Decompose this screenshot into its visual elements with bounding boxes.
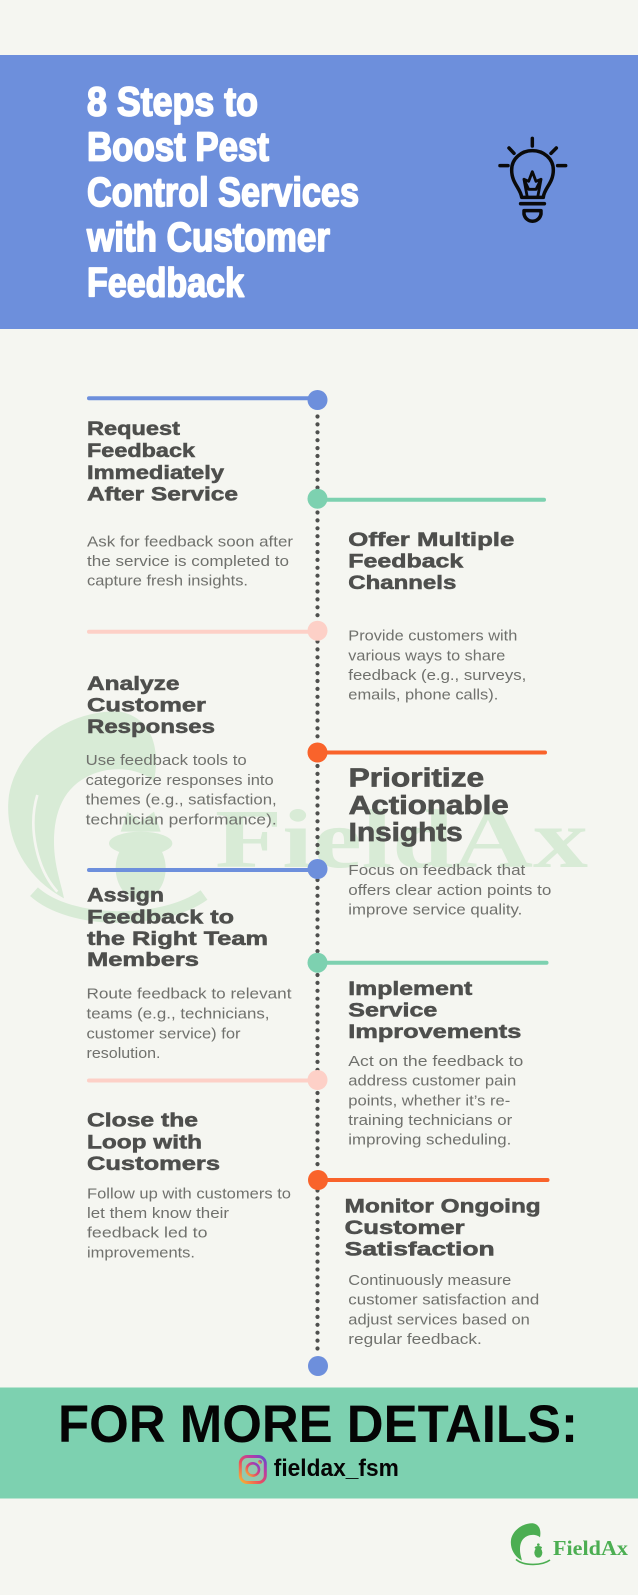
node: blue end xyxy=(308,1356,328,1376)
connector bar: green 2 xyxy=(322,961,546,965)
description: regular feedback. xyxy=(348,1331,482,1348)
heading: After Service xyxy=(87,483,238,505)
node: blue 1 xyxy=(308,390,328,410)
description: adjust services based on xyxy=(348,1311,530,1328)
description xyxy=(348,1053,523,1149)
heading xyxy=(348,978,521,1043)
connector bar: orange 2 xyxy=(322,1178,548,1182)
watermark: FieldAx logo: FieldAx xyxy=(215,793,588,886)
description: let them know their xyxy=(87,1205,229,1222)
heading: Feedback xyxy=(348,551,463,573)
description: Use feedback tools to xyxy=(86,752,247,769)
heading: Feedback xyxy=(87,440,195,462)
description: emails, phone calls). xyxy=(348,686,498,703)
description: Route feedback to relevant xyxy=(86,986,292,1003)
node: pink 1 xyxy=(308,621,328,641)
heading xyxy=(349,765,509,847)
description: feedback led to xyxy=(87,1225,208,1242)
header banner xyxy=(0,55,638,329)
description: Ask for feedback soon after xyxy=(87,534,293,551)
connector bar: green 1 xyxy=(322,498,544,502)
description: improving scheduling. xyxy=(348,1132,511,1149)
connector bar: pink 1 xyxy=(89,630,312,634)
heading: Immediately xyxy=(87,462,224,484)
heading: Members xyxy=(87,949,199,971)
node: green 2 xyxy=(308,953,328,973)
heading: Monitor Ongoing xyxy=(345,1195,541,1217)
heading: Assign xyxy=(87,885,164,907)
timeline xyxy=(89,390,548,1376)
heading: Offer Multiple xyxy=(348,529,514,551)
description xyxy=(348,1272,539,1348)
connector bar: pink 2 xyxy=(89,1078,312,1082)
heading: Implement xyxy=(348,978,473,1000)
description: Act on the feedback to xyxy=(348,1053,523,1070)
node: orange 2 xyxy=(308,1170,328,1190)
connector bar: blue 1 xyxy=(89,396,312,400)
icon: instagram xyxy=(240,1456,265,1482)
heading: Feedback to xyxy=(87,906,234,928)
description: resolution. xyxy=(86,1045,160,1062)
description xyxy=(348,862,551,918)
heading: Service xyxy=(348,1000,437,1022)
instagram handle: fieldax_fsm xyxy=(274,1455,399,1482)
step: implement improvements xyxy=(348,978,523,1149)
title: 8 Steps to xyxy=(87,78,258,124)
description: Provide customers with xyxy=(348,628,517,645)
title: Control Services xyxy=(87,169,359,215)
description: training technicians or xyxy=(348,1112,512,1129)
call to action: FOR MORE DETAILS: xyxy=(58,1395,578,1454)
timeline dotted spine xyxy=(315,416,320,1352)
node: green 1 xyxy=(308,489,328,509)
footer banner xyxy=(0,1388,638,1498)
icon: light bulb xyxy=(500,138,566,221)
description: various ways to share xyxy=(348,647,505,664)
heading: Channels xyxy=(348,572,456,594)
heading xyxy=(87,885,268,971)
title xyxy=(86,78,359,306)
step: assign feedback xyxy=(86,885,292,1062)
logo: FieldAx xyxy=(511,1523,629,1564)
step: multiple channels xyxy=(348,529,526,703)
node: orange 1 xyxy=(308,742,328,762)
heading xyxy=(87,673,215,738)
heading xyxy=(87,418,238,505)
heading: Customer xyxy=(87,695,207,717)
node: pink 2 xyxy=(308,1070,328,1090)
heading: Customer xyxy=(345,1217,465,1239)
step: close the loop xyxy=(87,1110,291,1262)
heading: the Right Team xyxy=(87,928,268,950)
description: teams (e.g., technicians, xyxy=(86,1006,270,1023)
description: points, whether it’s re- xyxy=(348,1092,510,1109)
node: blue 2 xyxy=(308,859,328,879)
heading: Prioritize xyxy=(349,765,484,793)
logo: FieldAx: FieldAx xyxy=(553,1536,629,1560)
title: Boost Pest xyxy=(87,124,269,170)
heading: Analyze xyxy=(87,673,180,695)
step: analyze responses xyxy=(86,673,277,828)
heading xyxy=(348,529,514,594)
description: Follow up with customers to xyxy=(87,1185,291,1202)
description: capture fresh insights. xyxy=(87,573,248,590)
heading: Close the xyxy=(87,1110,198,1132)
description: address customer pain xyxy=(348,1073,516,1090)
title: Feedback xyxy=(87,260,244,306)
description: themes (e.g., satisfaction, xyxy=(86,792,277,809)
description: improve service quality. xyxy=(348,901,522,918)
description: technician performance). xyxy=(86,811,277,828)
heading: Request xyxy=(87,418,181,440)
heading xyxy=(345,1195,541,1261)
description: customer service) for xyxy=(86,1025,240,1042)
description: the service is completed to xyxy=(87,553,289,570)
heading: Insights xyxy=(349,819,463,847)
description: Continuously measure xyxy=(348,1272,511,1289)
description: categorize responses into xyxy=(86,772,274,789)
heading: Customers xyxy=(87,1153,220,1175)
connector bar: orange 1 xyxy=(322,750,545,754)
description xyxy=(348,628,526,703)
description: Focus on feedback that xyxy=(348,862,526,879)
description xyxy=(86,986,292,1062)
title: with Customer xyxy=(86,214,330,260)
step: actionable insights xyxy=(348,765,551,918)
description xyxy=(87,1185,291,1262)
connector bar: blue 2 xyxy=(89,868,312,872)
heading: Actionable xyxy=(349,792,509,820)
heading: Responses xyxy=(87,716,215,738)
step: monitor satisfaction xyxy=(345,1195,541,1348)
heading: Improvements xyxy=(348,1021,521,1043)
watermark: FieldAx logo xyxy=(8,711,588,917)
description: customer satisfaction and xyxy=(348,1292,539,1309)
heading xyxy=(87,1110,220,1175)
heading: Loop with xyxy=(87,1131,202,1153)
description xyxy=(86,752,277,828)
description: feedback (e.g., surveys, xyxy=(348,667,526,684)
description: offers clear action points to xyxy=(348,882,551,899)
description xyxy=(87,534,293,590)
description: improvements. xyxy=(87,1245,195,1262)
heading: Satisfaction xyxy=(345,1239,495,1261)
step: request feedback xyxy=(87,418,293,590)
